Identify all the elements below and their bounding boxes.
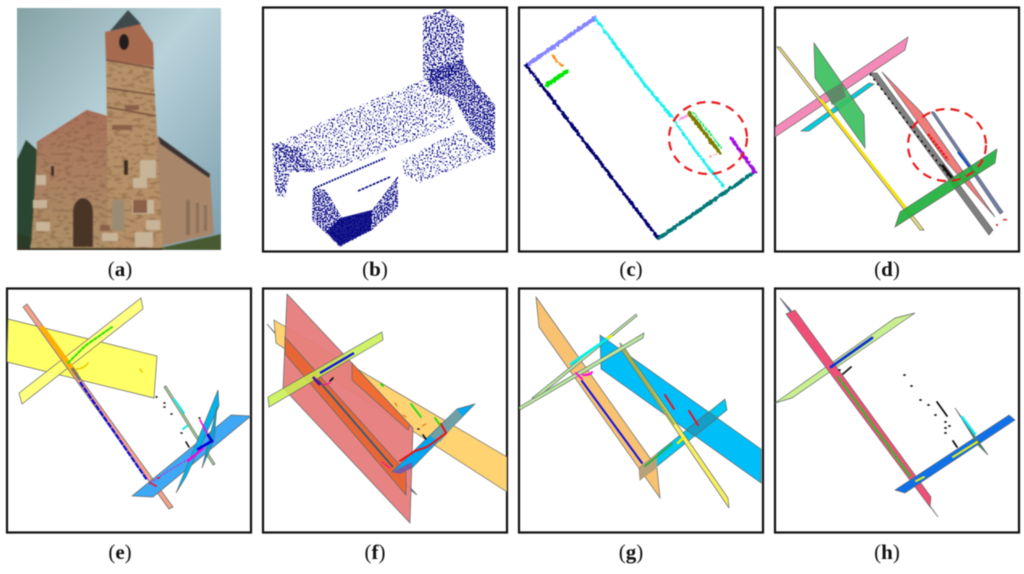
facade	[31, 111, 163, 248]
tower body	[105, 60, 160, 218]
light green plane	[775, 313, 915, 403]
frame g	[519, 288, 763, 532]
right long wall points	[402, 130, 495, 183]
salmon plane	[882, 72, 995, 217]
blue points	[80, 382, 147, 480]
red points	[400, 424, 446, 461]
gable roof edge	[37, 111, 107, 143]
dark orange inner	[285, 337, 406, 495]
panel f: fitted planes	[263, 288, 507, 532]
light red points	[710, 153, 718, 157]
red plane	[283, 294, 413, 523]
orange plane	[274, 320, 507, 492]
band overlap	[639, 453, 657, 480]
frame h	[775, 288, 1019, 532]
cyan points	[962, 417, 975, 434]
gray overlap	[826, 83, 846, 105]
caption d: (d)	[874, 257, 900, 281]
caption c: (c)	[619, 257, 643, 281]
band and plane overlap	[686, 412, 717, 436]
periwinkle segment	[527, 18, 595, 65]
large yellow plane	[7, 319, 157, 398]
thin green band two	[519, 333, 644, 410]
gray points	[72, 368, 80, 380]
stray points	[996, 219, 1007, 226]
frame c	[519, 8, 763, 252]
blocked window	[112, 200, 124, 231]
panel d: fitted planes	[775, 8, 1019, 252]
tower top points	[423, 9, 464, 85]
dark orange patch	[352, 363, 410, 430]
overlap on orange	[430, 409, 462, 442]
front block left points	[312, 176, 398, 247]
tower lower points	[430, 60, 495, 152]
lime band	[268, 332, 383, 407]
green segment	[547, 71, 567, 85]
olive band part	[622, 347, 674, 425]
door	[73, 198, 93, 247]
magenta segment	[188, 449, 202, 461]
sky	[17, 8, 221, 250]
quoin stones	[33, 160, 160, 247]
bell opening	[119, 34, 129, 50]
cyan lower segment	[675, 122, 724, 187]
side wall	[158, 137, 214, 246]
purple points	[313, 377, 320, 385]
magenta points	[323, 383, 390, 468]
black points	[870, 74, 950, 178]
yellow points	[916, 442, 977, 481]
blue plane	[600, 335, 761, 483]
green points	[381, 384, 440, 425]
panel b: point cloud	[263, 8, 507, 252]
pink segment	[680, 116, 687, 119]
frame f	[263, 288, 507, 532]
green points	[838, 377, 910, 476]
front block solid base	[326, 210, 372, 246]
dark stones	[100, 105, 147, 231]
thin green band one	[532, 314, 637, 398]
panel a: church photograph	[17, 8, 221, 251]
blue points	[320, 353, 354, 373]
red points	[928, 134, 948, 160]
side roof	[158, 136, 210, 178]
red points	[150, 478, 159, 486]
caption a: (a)	[108, 257, 132, 281]
slate plane	[931, 112, 1003, 214]
blue plane	[132, 415, 251, 497]
tower belfry	[105, 24, 154, 66]
cyan segment	[596, 19, 672, 117]
green lower plane	[895, 149, 997, 227]
navy segment	[526, 65, 658, 238]
green plane	[814, 43, 865, 148]
green points	[68, 327, 112, 363]
magenta points	[576, 372, 592, 379]
dark line	[318, 380, 393, 467]
small windows	[51, 160, 128, 176]
green fringe	[693, 112, 722, 149]
blue plane	[392, 404, 475, 472]
thin teal	[955, 408, 988, 455]
yellow band	[620, 343, 729, 508]
cyan spike two	[202, 407, 217, 468]
yellow plane	[777, 47, 924, 230]
tower roof	[110, 10, 141, 31]
yellow band	[19, 298, 143, 404]
cyan points	[174, 399, 187, 429]
purple segment	[731, 138, 755, 172]
grass	[158, 234, 221, 250]
blue points	[958, 152, 972, 170]
panel e: fitted planes	[7, 288, 251, 532]
blue points	[582, 381, 642, 463]
caption f: (f)	[364, 540, 386, 564]
yellow points	[608, 336, 683, 443]
cyan spike	[176, 390, 219, 493]
cyan plane	[801, 83, 874, 131]
olive segment	[689, 113, 720, 153]
panel g: fitted planes	[519, 288, 763, 532]
magenta points	[150, 448, 205, 483]
salmon band	[23, 304, 173, 509]
orange segment	[553, 55, 565, 67]
orange plane	[536, 297, 660, 498]
panel c: segmented points	[519, 8, 763, 252]
black points	[839, 367, 957, 447]
tree	[17, 140, 38, 240]
cyan band	[639, 399, 727, 480]
blue L	[198, 435, 212, 449]
purple overlap	[392, 462, 412, 474]
ground	[17, 233, 32, 250]
red dashed circle	[669, 102, 747, 174]
black points	[156, 397, 200, 447]
crimson band	[786, 310, 931, 507]
caption b: (b)	[362, 257, 388, 281]
black segment	[942, 165, 955, 182]
slate spike	[267, 324, 417, 495]
tower bands	[106, 60, 156, 116]
left end points	[272, 143, 315, 197]
caption e: (e)	[108, 540, 132, 564]
orange points	[395, 403, 426, 426]
cyan strip	[571, 337, 610, 364]
side arches	[186, 200, 207, 235]
blue plane	[895, 415, 1015, 493]
gray plane	[870, 73, 993, 235]
black points	[330, 378, 426, 439]
magenta tick	[200, 420, 207, 433]
inner ledge points	[315, 158, 385, 188]
yellow points	[821, 100, 910, 213]
teal segment	[659, 173, 753, 238]
yellow points	[76, 363, 142, 372]
ledge two points	[358, 177, 390, 191]
slate spikes	[780, 298, 938, 517]
orange overlap	[39, 326, 79, 376]
light green band	[164, 386, 215, 465]
red circle	[908, 109, 986, 181]
frame e	[7, 288, 251, 532]
caption g: (g)	[619, 540, 643, 564]
frame d	[775, 8, 1019, 252]
green points	[645, 444, 672, 466]
blue points	[831, 338, 872, 367]
frame b	[263, 8, 507, 252]
red points	[665, 395, 698, 425]
pink plane	[775, 37, 908, 137]
facade mottling dark	[31, 60, 163, 248]
panel h: fitted planes	[775, 288, 1019, 532]
long wall points	[273, 80, 455, 172]
caption h: (h)	[874, 540, 900, 564]
